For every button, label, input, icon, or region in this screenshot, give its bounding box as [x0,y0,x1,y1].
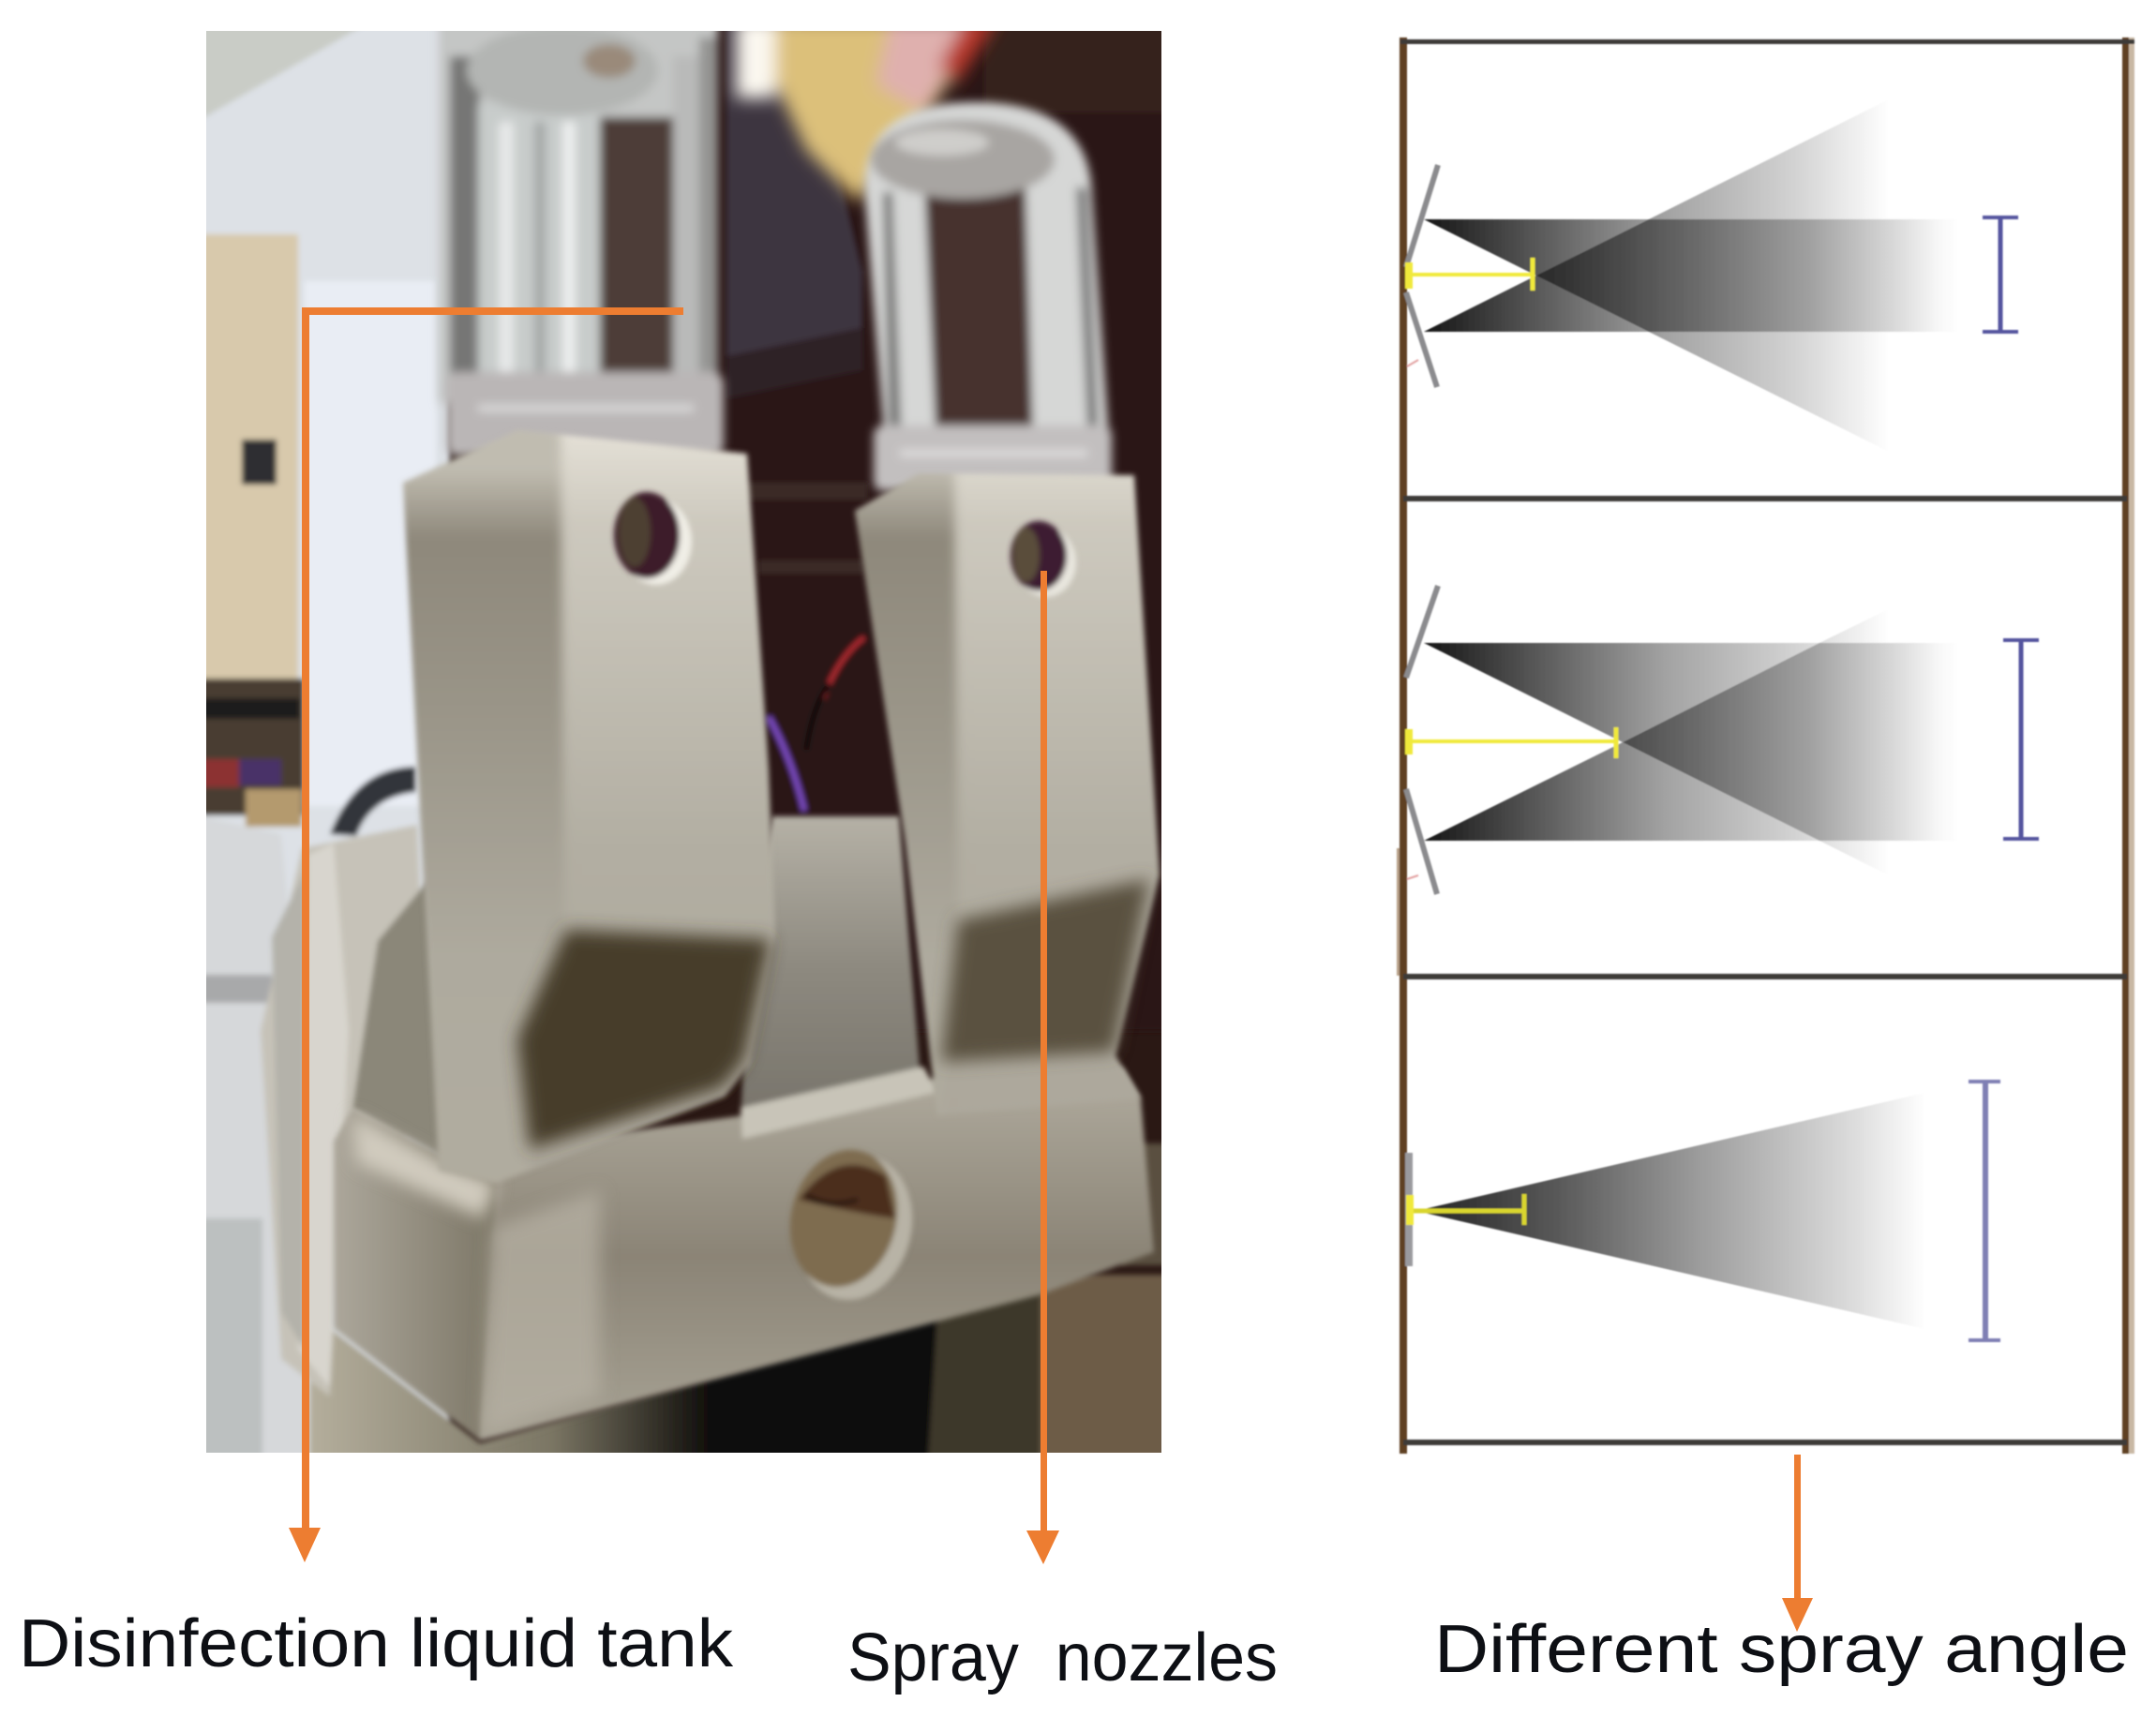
wires [769,637,864,811]
module body behind left block [351,883,441,1154]
yellow distance markers [1407,258,1616,1225]
dark wooden door background [703,19,1172,1265]
blue width bracket 2 [2003,640,2039,839]
base highlights [352,1115,600,1434]
label: spray nozzles: Spray nozzles [847,1620,1278,1695]
left glass tank [439,9,724,456]
lower background [309,1275,1167,1462]
blue width bracket 1 [1983,217,2018,332]
small red angle marks [1407,360,1418,879]
orange leader: spray nozzles [1026,571,1059,1564]
base of module [476,1065,1157,1443]
left block [399,433,776,1183]
right block [851,470,1161,1100]
label: disinfection liquid tank: Disinfection liquid tank [19,1606,734,1681]
panel 3: single cone spray [1416,1091,1933,1331]
frame lines [1397,37,2134,1454]
blue width bracket 3 [1969,1082,2000,1340]
base hole [806,1158,915,1302]
label: different spray angle: Different spray angle [1434,1612,2129,1687]
nozzle plates [1406,165,1438,1266]
spray angle diagram: three panels [1397,37,2134,1454]
centre block [741,816,921,1123]
panel 1: widest cross spray [1424,90,1959,461]
nozzle hole right [1016,528,1076,597]
blurred flowers [736,19,998,202]
orange arrow: spray angle [1782,1455,1813,1632]
panel 2: medium cross spray [1424,600,1959,885]
nozzle hole left [621,499,692,585]
shadows on module [517,879,1149,1149]
photo: spray module with two liquid tanks [197,9,1172,1462]
right glass tank [864,102,1112,491]
orange leader: liquid tank [289,307,683,1562]
room background left [197,19,450,1462]
cloth draped behind module [261,825,431,1396]
